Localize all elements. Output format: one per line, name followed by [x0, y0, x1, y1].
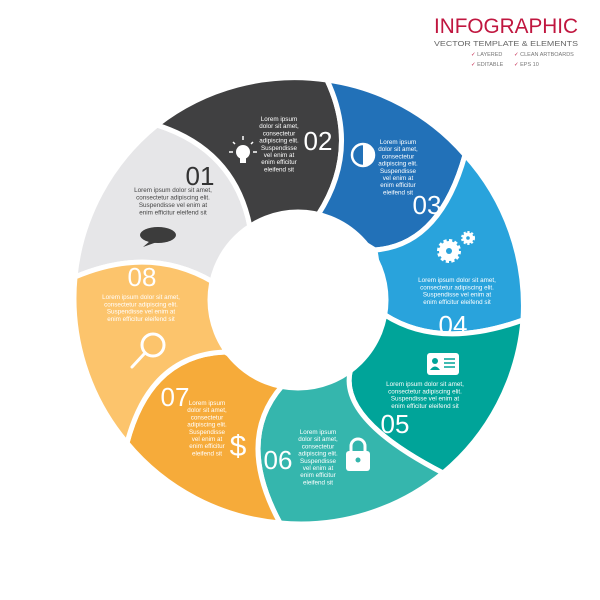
segment 01: [75, 125, 250, 282]
labels 06: Suspendisse: [300, 458, 337, 465]
labels 04: Lorem ipsum dolor sit amet,: [418, 277, 496, 284]
labels 01: 01: [186, 161, 214, 191]
segment 08: [74, 262, 225, 443]
labels 03: consectetur: [382, 153, 414, 160]
labels 04: [418, 232, 496, 340]
ring chart: [74, 78, 523, 524]
labels 05: [381, 353, 464, 439]
labels 03: adipiscing elit.: [378, 161, 418, 168]
feature checklist: ✓ CLEAN ARTBOARDS: [514, 52, 574, 58]
labels 05: Suspendisse vel enim at: [391, 396, 459, 403]
labels 01: Lorem ipsum dolor sit amet,: [134, 187, 212, 194]
labels 04: consectetur adipiscing elit.: [420, 284, 494, 291]
labels 03: Lorem ipsum: [380, 139, 416, 146]
labels 02: Suspendisse: [261, 145, 298, 152]
feature checklist: ✓ EPS 10: [514, 62, 539, 68]
labels 05: Lorem ipsum dolor sit amet,: [386, 381, 464, 388]
labels 07: dolor sit amet,: [187, 407, 227, 414]
labels 02: vel enim at: [264, 152, 294, 159]
feature checklist: ✓ LAYERED: [471, 52, 502, 58]
labels 03: vel enim at: [383, 175, 413, 182]
labels 07: Suspendisse: [189, 429, 226, 436]
labels 03: enim efficitur: [380, 182, 416, 189]
title: INFOGRAPHIC: [434, 15, 578, 38]
segment 02: [157, 78, 342, 227]
segment 03: [318, 80, 465, 250]
labels 06: eleifend sit: [303, 479, 333, 486]
labels 07: enim efficitur: [189, 443, 225, 450]
labels 06: [264, 429, 370, 486]
labels 08: [102, 262, 180, 367]
center hole: [210, 212, 386, 388]
icon: id card: [427, 353, 459, 375]
labels 07: 07: [161, 382, 189, 412]
labels 06: consectetur: [302, 443, 334, 450]
labels 08: 08: [128, 262, 156, 292]
labels 01: consectetur adipiscing elit.: [136, 194, 210, 202]
segment 04: [375, 155, 523, 334]
labels 02: eleifend sit: [264, 166, 294, 173]
labels 08: Lorem ipsum dolor sit amet,: [102, 294, 180, 301]
labels 07: consectetur: [191, 414, 223, 421]
labels 01: enim efficitur eleifend sit: [139, 210, 207, 216]
labels 01: Suspendisse vel enim at: [139, 202, 207, 209]
labels 02: consectetur: [263, 130, 295, 137]
labels 06: Lorem ipsum: [300, 429, 336, 436]
labels 06: vel enim at: [303, 465, 333, 472]
labels 07: adipiscing elit.: [187, 422, 227, 429]
title block: [434, 15, 578, 68]
labels 07: [161, 382, 247, 463]
labels 03: 03: [413, 190, 441, 220]
subtitle: VECTOR TEMPLATE & ELEMENTS: [434, 39, 578, 48]
icon: half circle: [352, 144, 374, 166]
labels 08: consectetur adipiscing elit.: [104, 301, 178, 308]
icon: gears: [439, 232, 474, 261]
labels 07: vel enim at: [192, 436, 222, 443]
icon: magnifier: [132, 334, 164, 367]
labels 08: Suspendisse vel enim at: [107, 309, 175, 316]
labels 02: dolor sit amet,: [259, 123, 299, 130]
labels 05: enim efficitur eleifend sit: [391, 403, 459, 410]
feature checklist: [471, 52, 574, 68]
labels 04: enim efficitur eleifend sit: [423, 299, 491, 306]
labels 03: Suspendisse: [380, 168, 417, 175]
segment 05: [349, 315, 523, 473]
labels 02: Lorem ipsum: [261, 116, 297, 123]
labels 04: Suspendisse vel enim at: [423, 292, 491, 299]
labels 02: [229, 116, 332, 173]
labels 04: 04: [439, 310, 467, 340]
labels 02: enim efficitur: [261, 159, 297, 166]
icon: padlock: [346, 439, 370, 471]
segment 07: [127, 352, 282, 523]
labels 05: 05: [381, 409, 409, 439]
labels 02: adipiscing elit.: [259, 138, 299, 145]
labels 05: consectetur adipiscing elit.: [388, 388, 462, 395]
labels 08: enim efficitur eleifend sit: [107, 316, 175, 323]
labels 01: [134, 161, 214, 247]
labels 07: Lorem ipsum: [189, 400, 225, 407]
labels 03: dolor sit amet,: [378, 146, 418, 153]
labels 03: [352, 139, 441, 220]
labels 06: dolor sit amet,: [298, 436, 338, 443]
labels 06: 06: [264, 445, 292, 475]
labels 06: enim efficitur: [300, 472, 336, 479]
icon: dollar: $: [230, 430, 247, 463]
labels 07: eleifend sit: [192, 450, 222, 457]
icon: speech bubble: [140, 227, 176, 247]
feature checklist: ✓ EDITABLE: [471, 62, 504, 68]
labels 02: 02: [304, 126, 332, 156]
labels 03: eleifend sit: [383, 189, 413, 196]
labels 06: adipiscing elit.: [298, 451, 338, 458]
segment 06: [258, 372, 443, 524]
icon: light bulb: [229, 136, 257, 163]
